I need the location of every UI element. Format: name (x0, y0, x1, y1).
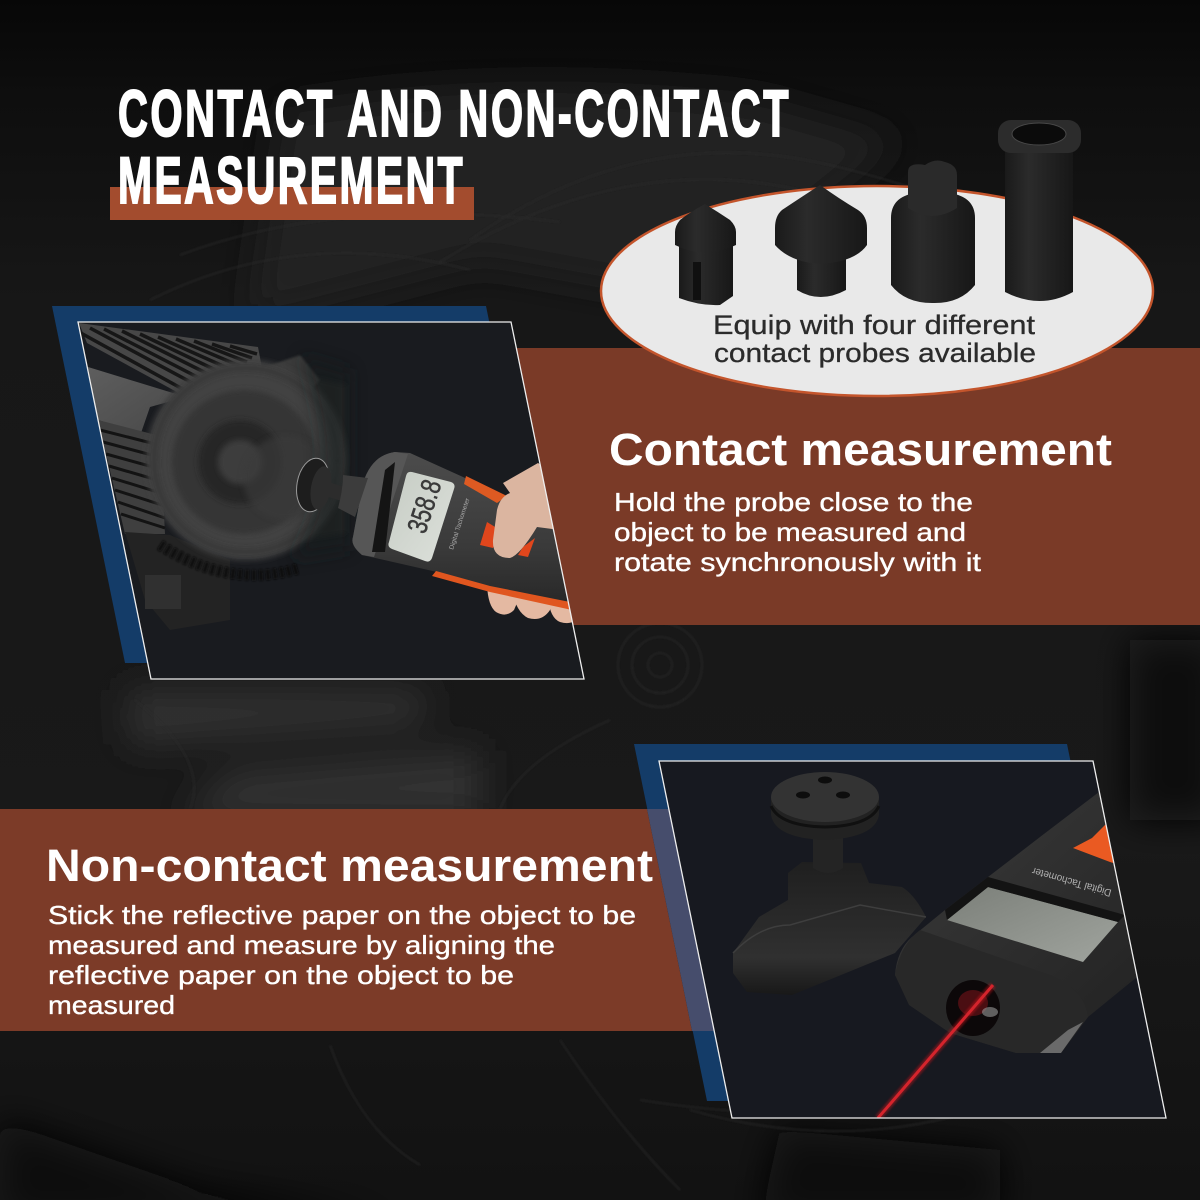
orange buttons (480, 522, 495, 548)
description: object to be measured and (614, 517, 966, 547)
device body (352, 452, 568, 602)
text block: non-contact measurement (46, 840, 653, 1020)
holder base (733, 862, 926, 995)
blue backing panel: non-contact (634, 744, 1140, 1101)
description: measured and measure by aligning the (48, 930, 555, 960)
icon: probe 2 (775, 185, 867, 297)
device body (895, 792, 1136, 1017)
callout text: contact probes available (714, 338, 1036, 368)
lens (946, 980, 1000, 1036)
motor illustration (79, 323, 350, 630)
callout: four contact probes (601, 120, 1153, 396)
probe disc and shaft (293, 456, 368, 517)
frame (78, 322, 584, 679)
description: measured (48, 990, 175, 1020)
icon: probe 3 (891, 161, 975, 303)
description (48, 900, 636, 1020)
orange buttons (1073, 824, 1114, 863)
reflective holder accessory (733, 772, 926, 995)
brown band: non-contact measurement (0, 809, 720, 1031)
hand (493, 463, 560, 558)
fingers below device (488, 591, 572, 624)
laser beam (878, 985, 993, 1118)
brown band: contact measurement (515, 348, 1200, 625)
head cap (352, 452, 408, 557)
tachometer with hand (293, 452, 580, 623)
icon: probe 4 (998, 120, 1081, 301)
photo panel: contact measurement (78, 322, 584, 679)
blue backing panel: contact (52, 306, 559, 663)
holder stem (813, 838, 843, 862)
device label: Digital Tachometer (448, 497, 472, 551)
non-contact tachometer (895, 792, 1136, 1053)
lcd display (947, 887, 1118, 962)
title underline bar (110, 187, 474, 220)
callout text (713, 310, 1036, 368)
title line 1: CONTACT AND NON-CONTACT (118, 76, 791, 150)
description: Hold the probe close to the (614, 487, 973, 517)
callout text: Equip with four different (713, 310, 1036, 340)
description: Stick the reflective paper on the object to be (48, 900, 636, 930)
description: reflective paper on the object to be (48, 960, 514, 990)
callout ellipse (601, 186, 1153, 396)
photo panel: non-contact measurement (659, 761, 1180, 1118)
heading: Non-contact measurement (46, 840, 653, 891)
lcd reading: 358.8 (401, 476, 447, 537)
frame (659, 761, 1166, 1118)
title line 2: MEASUREMENT (118, 143, 465, 217)
title (110, 76, 791, 220)
description (614, 487, 982, 577)
head front (895, 930, 953, 1030)
holder disc (771, 797, 879, 840)
heading: Contact measurement (609, 424, 1112, 475)
description: rotate synchronously with it (614, 547, 982, 577)
icon: probe 1 (675, 204, 736, 305)
orange trim (464, 476, 507, 503)
lcd display (388, 472, 455, 562)
device label: Digital Tachometer (1030, 864, 1113, 899)
text block: contact measurement (609, 424, 1112, 577)
